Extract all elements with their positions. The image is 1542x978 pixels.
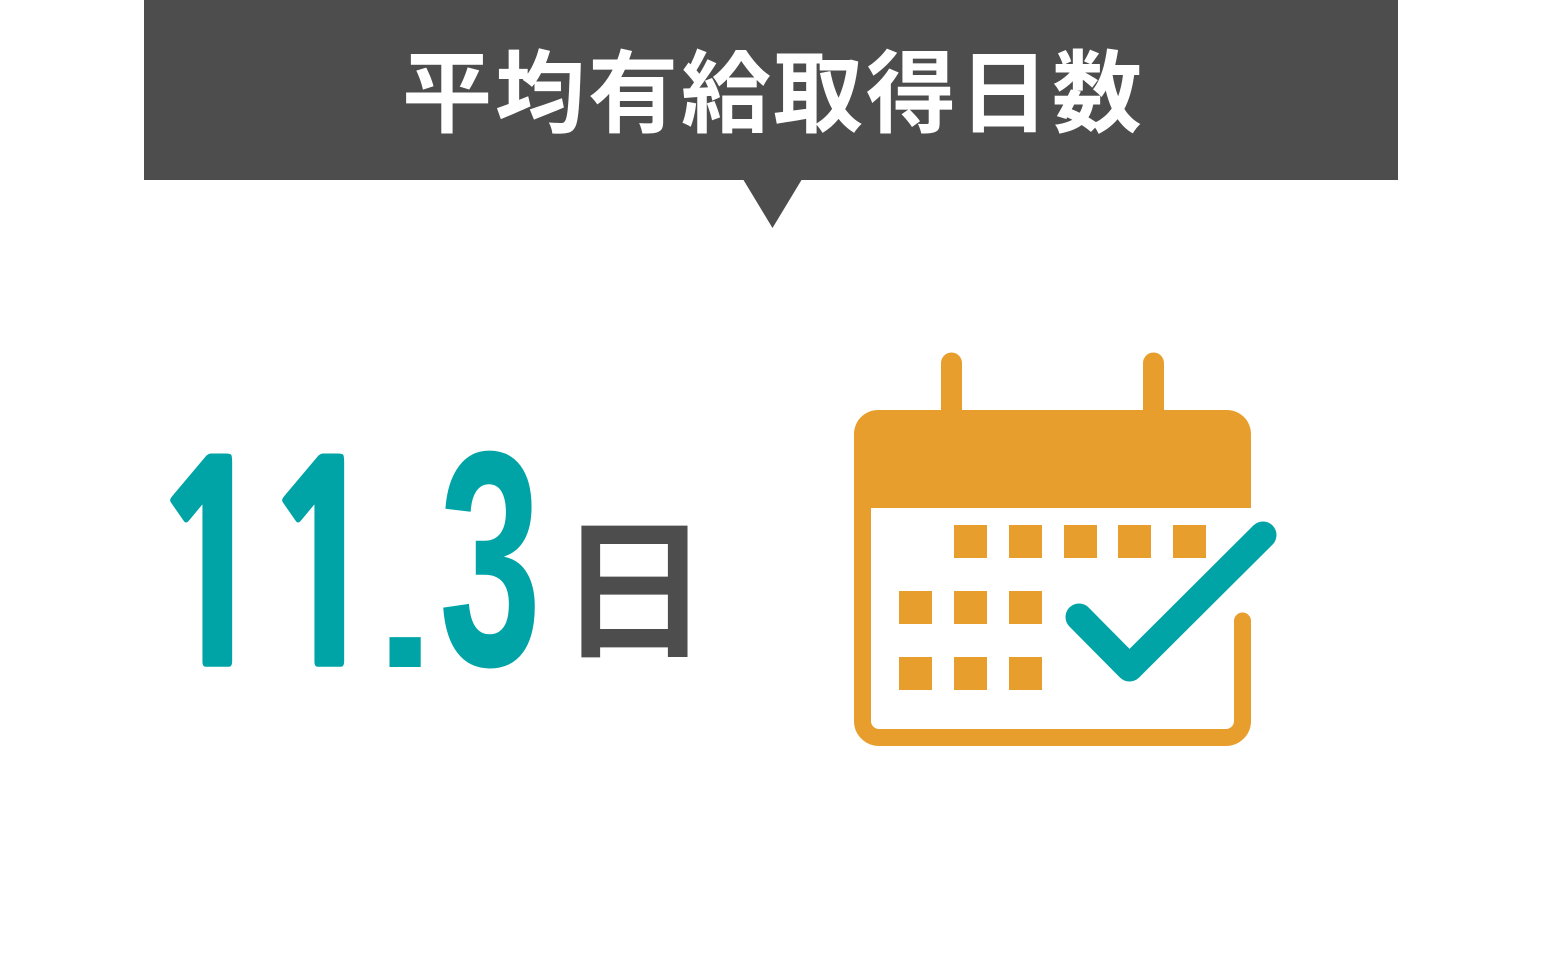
calendar header <box>854 410 1251 508</box>
check mark <box>1079 535 1263 668</box>
icon: calendar with check mark <box>854 353 1263 738</box>
header banner <box>144 0 1398 228</box>
title: 平均有給取得日数 <box>402 21 1142 151</box>
number: 11.3: . <box>374 485 436 710</box>
number: 11.3: 1 <box>147 431 279 706</box>
number: 11.3: 1 <box>259 431 391 706</box>
number: 11.3 <box>147 387 541 730</box>
calendar date squares <box>899 525 1206 690</box>
calendar rings <box>941 353 1164 412</box>
calendar body outline <box>862 500 1242 738</box>
statistic value <box>147 387 710 730</box>
number: 11.3: 3 <box>439 387 541 730</box>
unit: day: 日 <box>558 470 710 690</box>
